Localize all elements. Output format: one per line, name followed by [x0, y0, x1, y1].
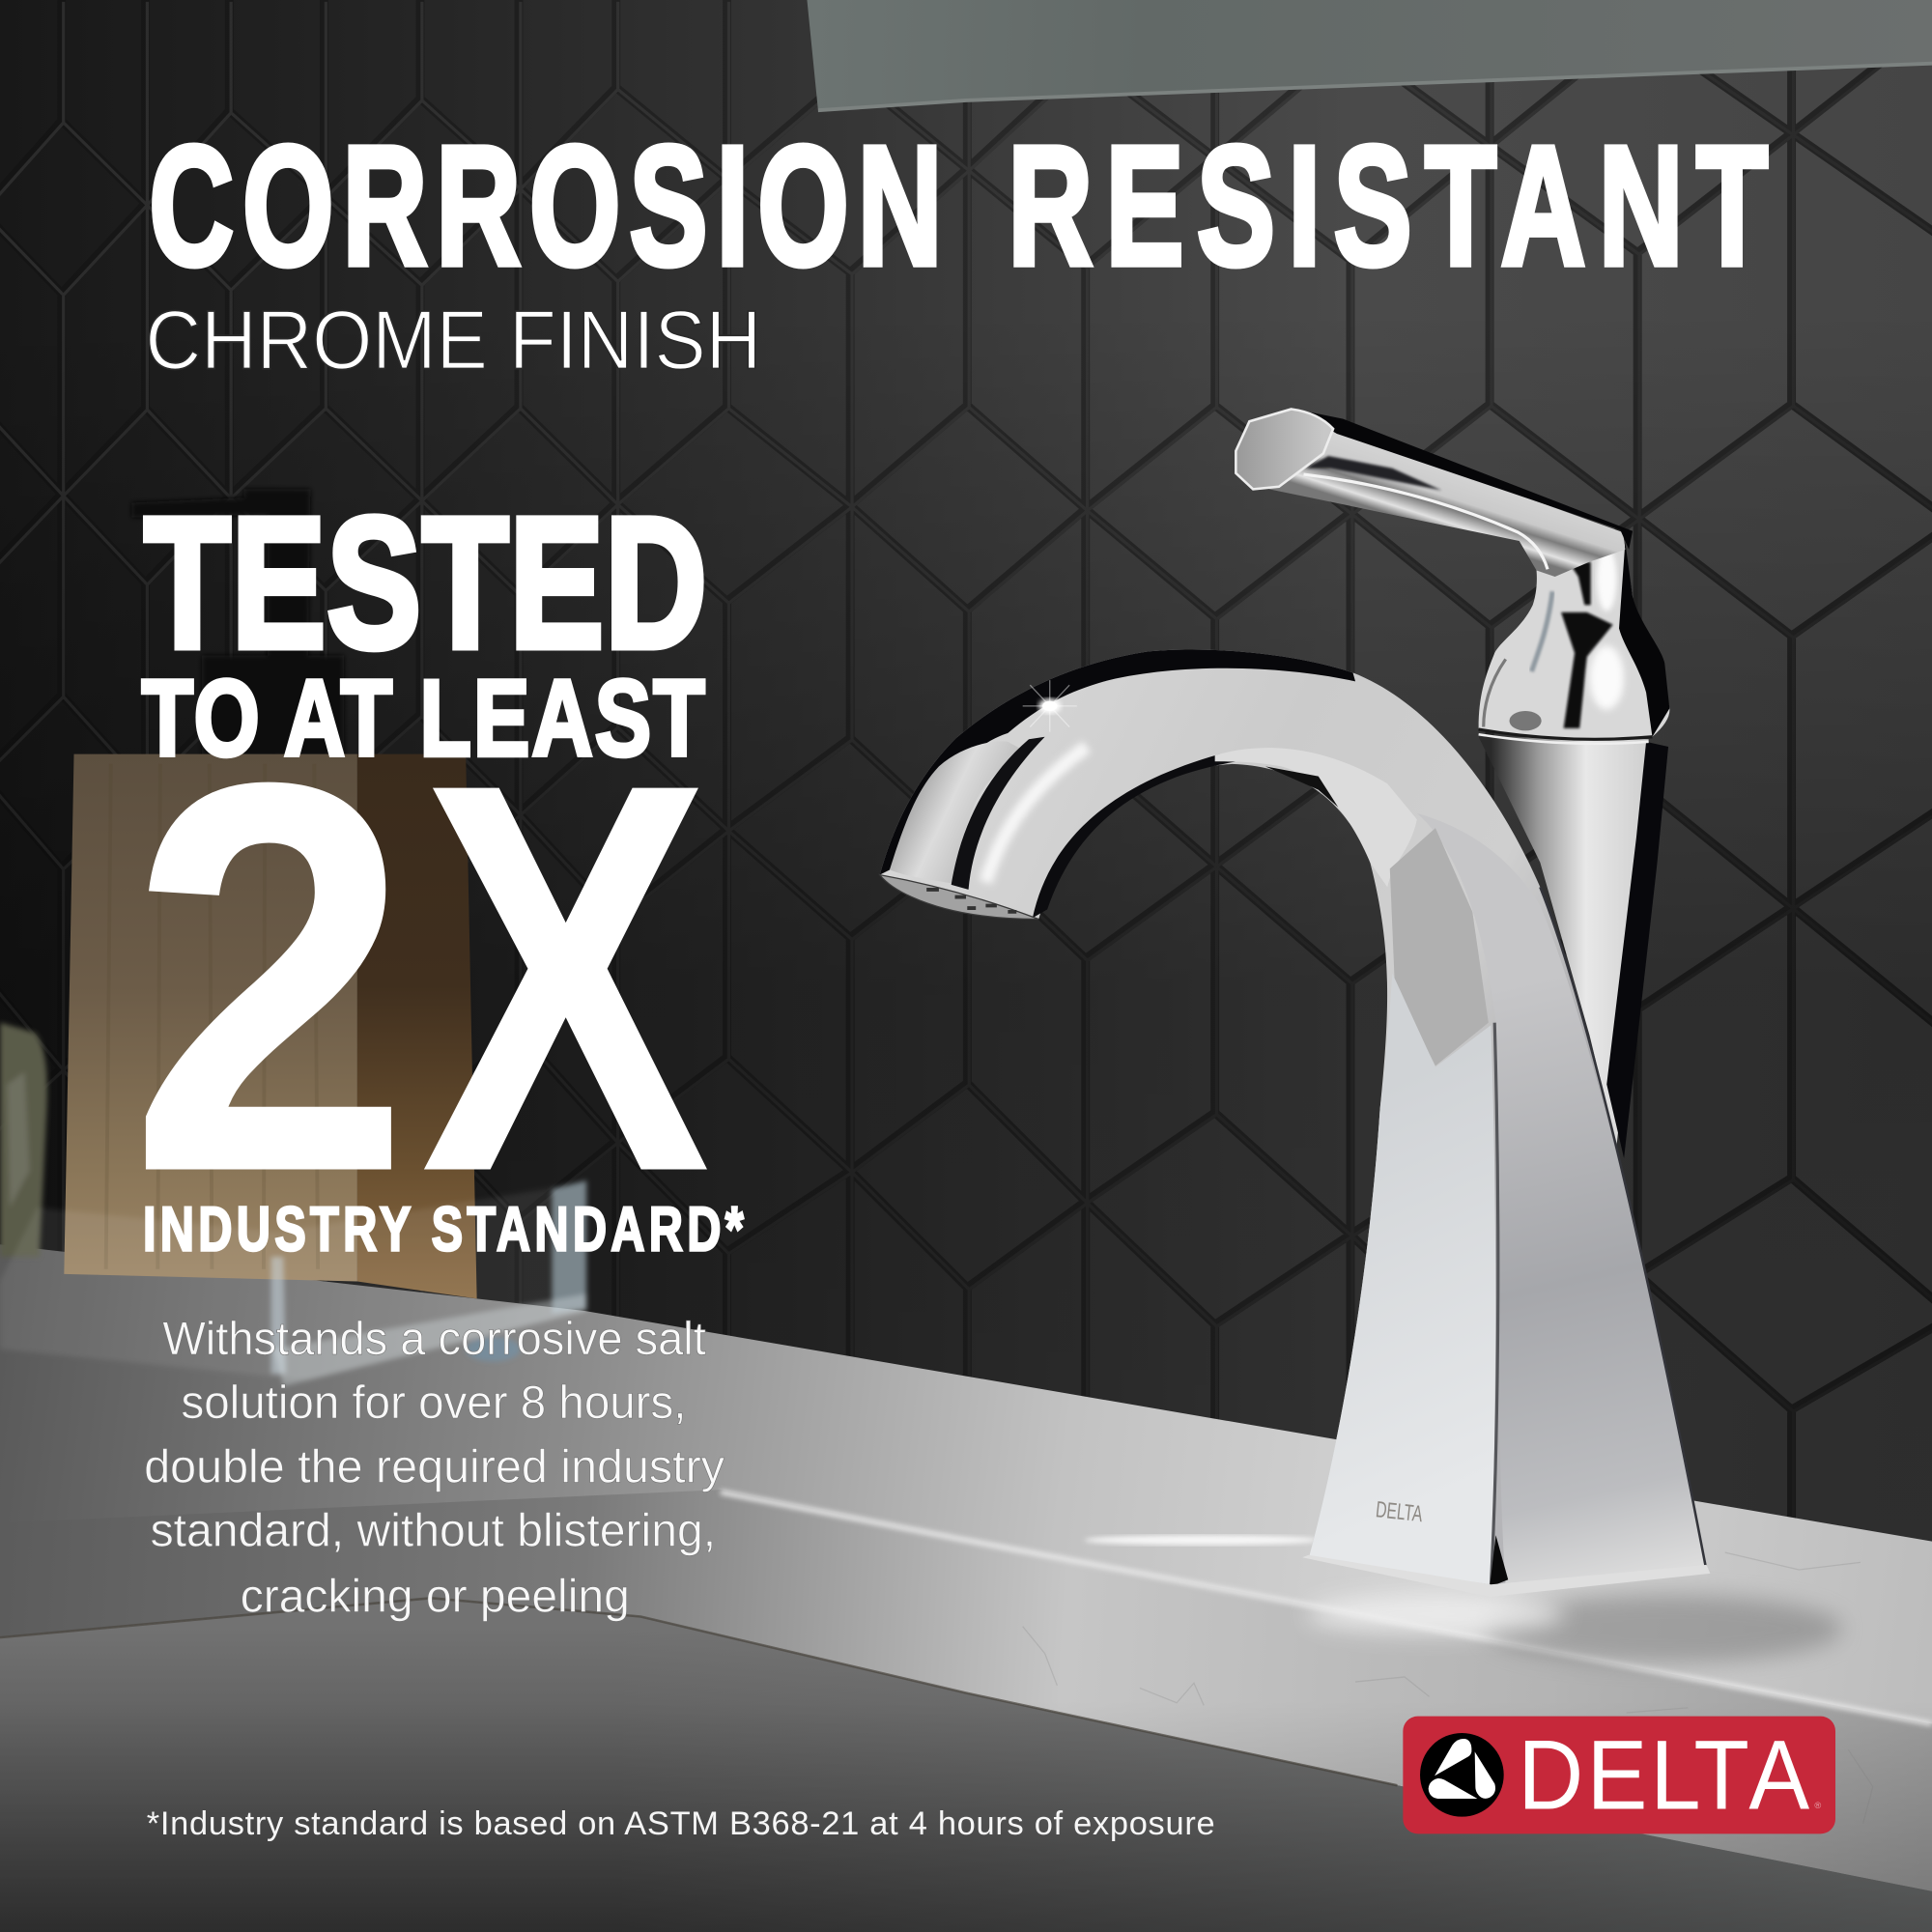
counter top surface — [0, 1244, 1932, 1749]
description: cracking or peeling — [241, 1570, 630, 1622]
left glass vase — [0, 1023, 47, 1257]
faucet body behind spout — [1479, 737, 1649, 1146]
title: RESISTANT — [1008, 111, 1768, 301]
base right face — [1417, 813, 1707, 1587]
dark stripe — [952, 737, 1045, 890]
description: Withstands a corrosive salt — [162, 1313, 706, 1365]
title: CORROSION — [149, 111, 942, 301]
description: double the required industry — [144, 1440, 725, 1492]
title — [149, 111, 1768, 301]
marble veining — [1023, 1552, 1873, 1824]
registered mark: ® — [1814, 1801, 1821, 1810]
center edge line — [1491, 1023, 1498, 1587]
2X big number — [128, 667, 713, 1287]
faucet — [880, 409, 1710, 1597]
lever handle — [1269, 409, 1633, 577]
counter — [0, 1244, 1932, 1932]
heading — [146, 111, 1768, 386]
counter front face — [0, 1490, 1932, 1897]
lower basin — [0, 1598, 1932, 1932]
under-arch bright surface — [1215, 748, 1417, 887]
body black edge — [1606, 742, 1668, 1158]
sparkle — [1023, 680, 1077, 732]
right edge — [1540, 887, 1707, 1571]
inner reflection panel — [1390, 828, 1489, 1065]
claim block — [128, 479, 744, 1287]
acrylic tray — [0, 1180, 586, 1386]
description: solution for over 8 hours, — [182, 1377, 686, 1429]
footnote: *Industry standard is based on ASTM B368-21 at 4 hours of exposure — [147, 1805, 1215, 1842]
spout top black band — [880, 650, 1355, 875]
description — [144, 1313, 725, 1622]
nosing highlight — [721, 1492, 1932, 1723]
description: standard, without blistering, — [151, 1505, 716, 1557]
industry standard: INDUSTRY STANDARD* — [143, 1195, 744, 1264]
2X big number: X — [420, 667, 713, 1287]
lever end cap — [1236, 409, 1333, 489]
base left face — [1309, 974, 1495, 1584]
faucet logo mark: DELTA — [1375, 1496, 1424, 1526]
subtitle: CHROME FINISH — [146, 293, 761, 386]
logo wordmark: DELTA — [1518, 1719, 1810, 1831]
nozzle lobe — [890, 741, 1021, 884]
logo emblem — [1420, 1733, 1504, 1817]
to at least: TO AT LEAST — [142, 659, 705, 780]
counter shadow — [1485, 1595, 1842, 1663]
bottle silhouette — [131, 489, 344, 756]
under-arch dark lens — [1265, 766, 1338, 807]
Delta logo — [1403, 1717, 1835, 1833]
base plate — [1302, 1555, 1710, 1597]
2X big number: 2 — [128, 667, 412, 1287]
mirror — [807, 0, 1932, 112]
wooden block — [64, 754, 477, 1298]
dome reflections — [1479, 542, 1669, 744]
reflected light — [1084, 1535, 1319, 1545]
tested: TESTED — [144, 479, 707, 687]
dome and neck — [1479, 532, 1669, 739]
dark base notch — [1490, 1535, 1508, 1587]
logo red badge — [1403, 1717, 1835, 1833]
aerator — [880, 875, 1038, 920]
tube highlight — [985, 747, 1087, 882]
under-arch dark band — [1033, 754, 1237, 918]
spout — [880, 650, 1707, 1587]
